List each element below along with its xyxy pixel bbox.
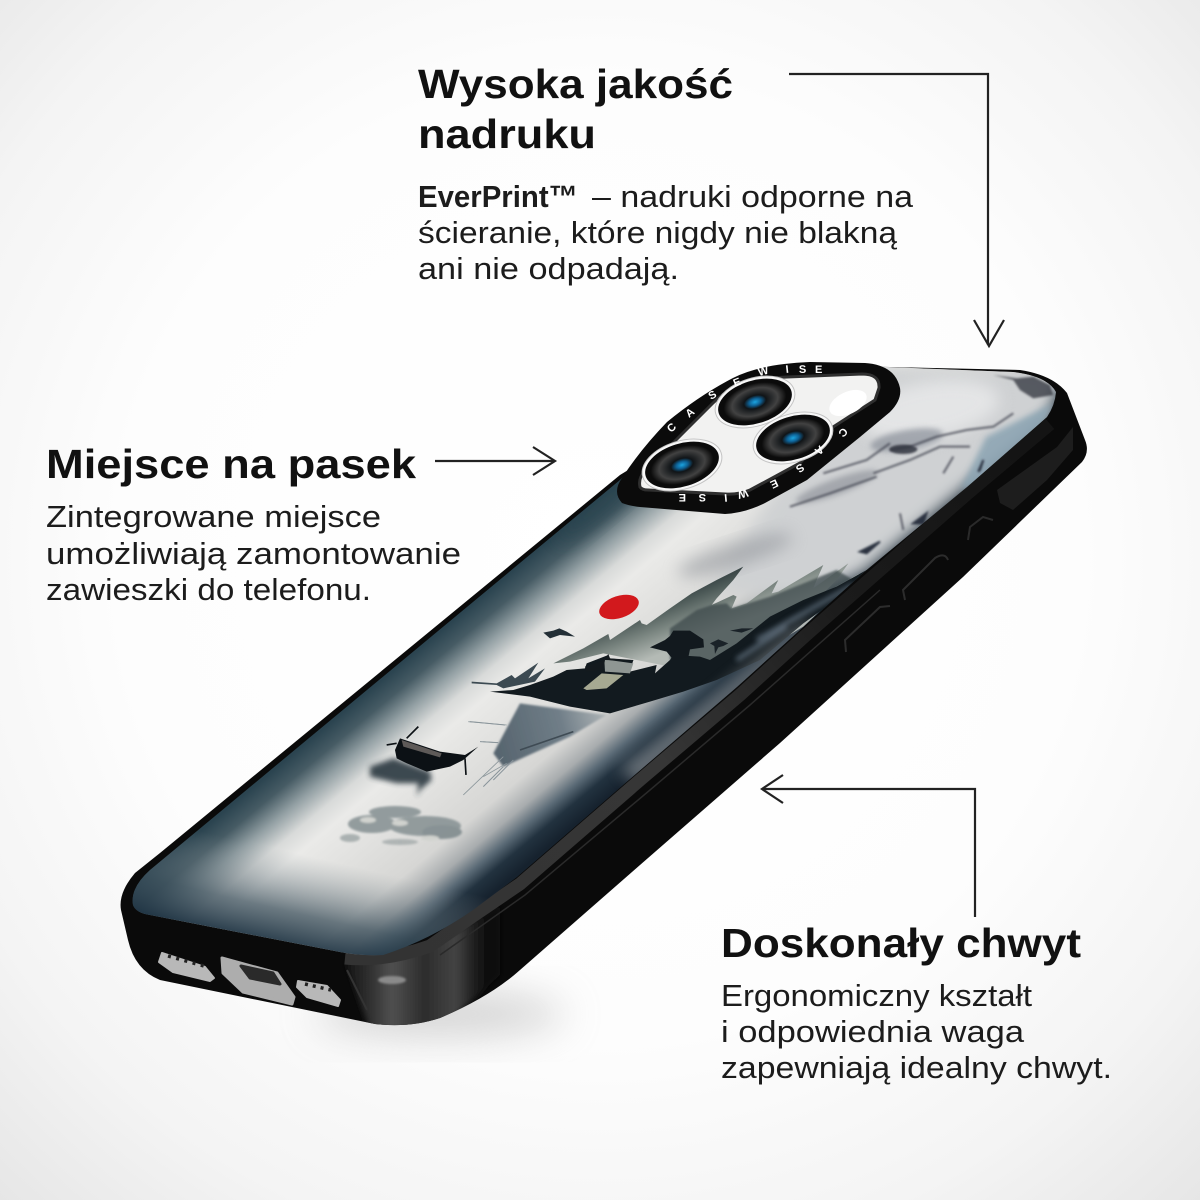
grey ink haze — [869, 424, 944, 456]
mottled reflected cloud — [340, 806, 462, 845]
flash highlight — [825, 385, 871, 421]
right blue streaks — [737, 585, 853, 660]
description — [46, 499, 461, 607]
cloud gap one — [360, 817, 376, 823]
case body — [121, 365, 1087, 1025]
small left ridge — [472, 663, 545, 688]
tree canopy — [650, 631, 704, 660]
left speaker holes — [168, 956, 204, 966]
description — [721, 978, 1112, 1085]
heading: Doskonały chwyt — [721, 920, 1081, 966]
ring lettering upper: CASEWISE — [665, 364, 822, 435]
callout: print quality — [418, 61, 914, 286]
lower mist streak — [620, 625, 820, 785]
description: zapewniają idealny chwyt. — [721, 1050, 1112, 1085]
description: ścieranie, które nigdy nie blakną — [418, 215, 898, 250]
camera ring — [617, 362, 900, 514]
reflection streaks — [470, 722, 513, 787]
ring lettering lower: CASEWISE — [679, 425, 850, 503]
distant islet — [543, 628, 575, 638]
callout: strap slot — [46, 441, 461, 607]
description: EverPrint™ — [418, 179, 578, 214]
description: Zintegrowane miejsce — [46, 499, 381, 534]
corner ink scribble — [993, 375, 1053, 398]
arrow: to top edge of the case — [789, 74, 1004, 346]
pale slope — [583, 673, 623, 690]
description: i odpowiednia waga — [721, 1014, 1025, 1049]
charging port — [222, 958, 294, 1004]
left speaker — [159, 953, 214, 981]
cloud patch two — [369, 806, 421, 818]
heading — [418, 61, 733, 157]
reflection streaks — [463, 722, 507, 795]
side rim highlight — [345, 424, 1050, 959]
tree canopy right — [710, 639, 728, 654]
reflection — [493, 703, 607, 767]
deck planks — [402, 740, 442, 757]
reflection ridge — [520, 732, 573, 750]
blue wash at corner — [960, 403, 1053, 490]
cloud patch six — [382, 839, 418, 845]
right speaker — [297, 981, 340, 1006]
strap slot — [997, 427, 1073, 510]
corner seam — [347, 970, 367, 1010]
cloud gap three — [421, 836, 439, 840]
cloud patch five — [340, 834, 360, 842]
camera opening — [640, 374, 879, 494]
description: zawieszki do telefonu. — [46, 572, 371, 607]
charging port opening — [241, 966, 280, 984]
island dark mass — [490, 570, 867, 713]
description — [418, 179, 914, 286]
arrow: to strap slot — [435, 447, 555, 475]
tree canopy far right — [730, 628, 753, 633]
mast and oar — [387, 727, 466, 775]
lens two — [747, 403, 839, 473]
description: – nadruki odporne na — [592, 179, 914, 214]
boat shadow — [370, 758, 432, 797]
volume up button — [903, 555, 948, 600]
branch strokes — [790, 413, 1013, 530]
cloud patch four — [422, 825, 462, 839]
phone shadow — [315, 992, 565, 1036]
heading: Wysoka jakość — [418, 61, 733, 107]
dark lower end — [132, 837, 482, 956]
mountain ridges — [553, 563, 860, 667]
darker mid ridge — [670, 570, 853, 663]
sun — [599, 594, 639, 620]
glossy bottom corner — [348, 918, 484, 1026]
gloss highlight — [378, 976, 406, 984]
rim groove — [440, 590, 880, 955]
heading: Miejsce na pasek — [46, 441, 416, 487]
temple roof — [585, 654, 634, 668]
lens three — [636, 430, 728, 500]
top left dark haze — [572, 487, 628, 540]
upper right light wash — [710, 366, 1060, 600]
arrow: to case side — [762, 775, 975, 917]
cloud patch one — [348, 815, 396, 833]
boat — [370, 722, 507, 797]
hull — [395, 738, 478, 772]
grey ink haze left — [794, 468, 878, 506]
temple wall — [604, 659, 633, 673]
cloud gap two — [392, 820, 408, 826]
silence switch — [968, 517, 993, 540]
lens one — [709, 367, 801, 437]
heading: nadruku — [418, 111, 596, 157]
face base gradient — [132, 366, 1056, 956]
volume down button — [845, 606, 890, 652]
right speaker holes — [305, 984, 331, 990]
grey cloud — [674, 525, 796, 585]
description: ani nie odpadają. — [418, 251, 679, 286]
bright cloud — [868, 378, 999, 436]
ink clouds and branches — [790, 375, 1053, 553]
gloss shape — [348, 918, 484, 1026]
phone case illustration — [100, 340, 1100, 1030]
cloud patch three — [389, 816, 461, 836]
printed back face — [132, 366, 1056, 956]
mountain scene — [470, 563, 867, 787]
dense ink blot — [889, 445, 917, 454]
description: umożliwiają zamontowanie — [46, 536, 461, 571]
description: Ergonomiczny kształt — [721, 978, 1032, 1013]
callout: grip — [721, 920, 1112, 1085]
ink spots — [860, 460, 983, 553]
